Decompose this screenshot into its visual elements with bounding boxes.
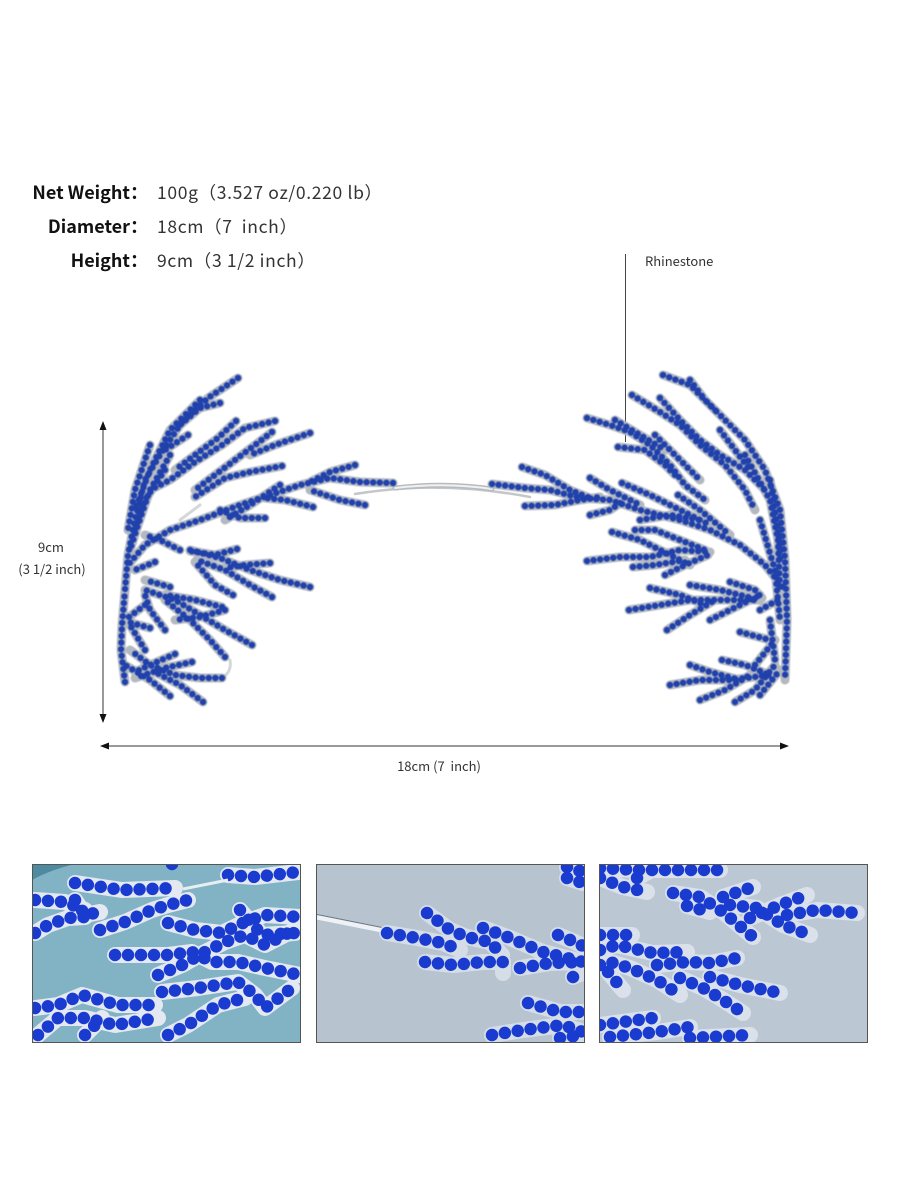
detail photo 2: grey background with wire [316,864,585,1043]
net weight: Net Weight： [32,179,148,205]
left rhinestone leaf cluster [121,378,393,702]
height label: (3 1/2 inch) [18,559,86,578]
arrow: diameter dimension [100,742,789,750]
rhinestone callout: Rhinestone [645,251,713,270]
arrow: height dimension [100,421,106,723]
height [71,247,315,273]
headband centre wire [180,485,530,678]
detail photo 1: teal background [32,864,301,1043]
right rhinestone leaf cluster [492,375,787,702]
net weight [32,179,383,205]
detail photo 3: pale grey background [599,864,868,1043]
height label [18,537,86,578]
height: 9cm（3 1/2 inch） [157,248,315,273]
net weight: 100g（3.527 oz/0.220 lb） [157,180,383,205]
height: Height： [71,247,148,273]
diameter: 18cm（7 inch） [157,214,298,239]
diameter [48,213,298,239]
diameter: Diameter： [48,213,148,239]
diameter label: 18cm (7 inch) [397,756,481,775]
height label: 9cm [38,537,64,556]
specifications text block [32,179,383,273]
